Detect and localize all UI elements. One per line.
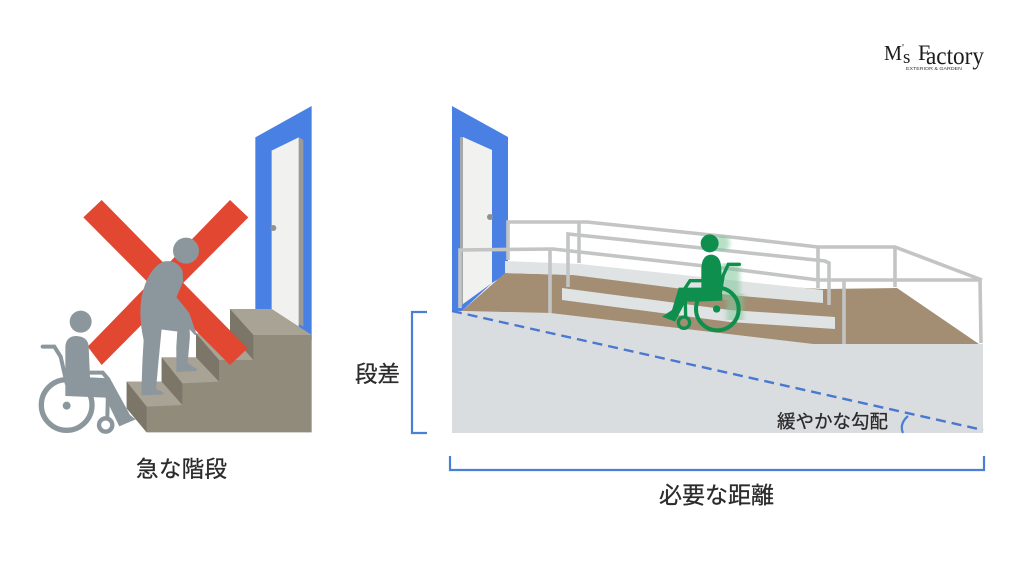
- logo: [884, 40, 984, 71]
- panel: ramp ground: [452, 311, 983, 433]
- ramp surface: [462, 273, 979, 344]
- logo: EXTERIOR & GARDEN: [906, 66, 962, 71]
- icon: person climbing stairs: [141, 239, 198, 394]
- upper curb: [505, 261, 823, 303]
- label: required distance: 必要な距離: [659, 482, 774, 508]
- icon: green wheelchair user: [662, 234, 743, 330]
- logo: F: [918, 40, 930, 65]
- red cross mark: [83, 200, 248, 365]
- dashed slope line: [452, 311, 983, 430]
- angle arc: [902, 416, 908, 433]
- door with blue frame: [255, 106, 312, 340]
- label: steep stairs: 急な階段: [136, 457, 227, 482]
- height bracket: [412, 312, 427, 433]
- icon: wheelchair user: [41, 311, 136, 432]
- motion blur: [714, 235, 743, 320]
- logo: M: [884, 41, 902, 65]
- lower curb: [562, 288, 835, 329]
- logo: ': [902, 42, 904, 54]
- label: gentle slope: 緩やかな勾配: [777, 411, 888, 432]
- stairs: [127, 309, 312, 432]
- distance bracket: [450, 456, 984, 470]
- label: height difference: 段差: [355, 362, 400, 387]
- ramp: [462, 261, 979, 344]
- panel: steep stairs: [41, 106, 312, 432]
- logo: s: [903, 47, 910, 68]
- door with blue frame: [452, 106, 508, 311]
- handrails: [460, 222, 982, 344]
- logo: actory: [926, 43, 984, 70]
